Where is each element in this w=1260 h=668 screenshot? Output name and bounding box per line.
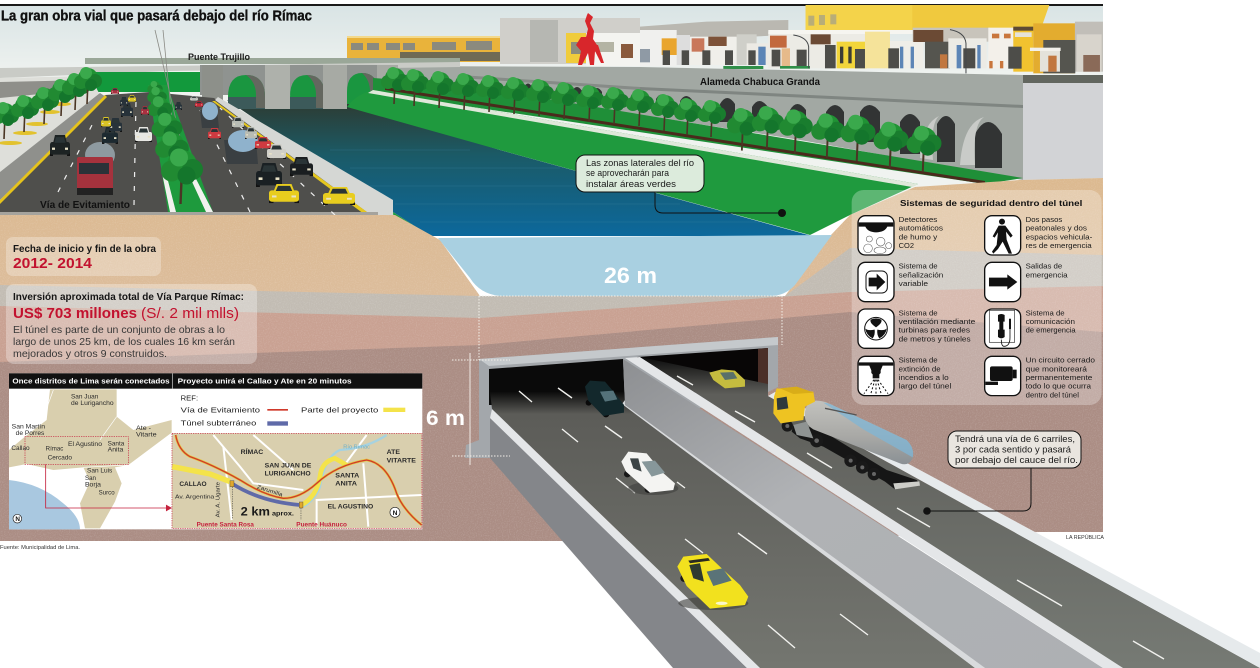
map: project route xyxy=(172,433,422,529)
label: Via de Evitamiento: Vía de Evitamiento xyxy=(40,200,130,211)
panel: investment: (S/. 2 mil mlls) xyxy=(141,305,239,322)
map: project route: ANITA xyxy=(335,481,357,488)
panel: project dates: Fecha de inicio y fin de la obra xyxy=(13,244,156,255)
label: Alameda Chabuca Granda: Alameda Chabuca Granda xyxy=(700,77,820,88)
back buildings west xyxy=(347,18,640,66)
map: Lima districts: San Martín xyxy=(12,423,45,430)
map legend: Parte del proyecto xyxy=(301,405,378,414)
text: pedestrian exits: espacios vehicula- xyxy=(1026,232,1093,241)
map: Lima districts: San Luis xyxy=(87,467,113,474)
map: project route: Puente Santa Rosa xyxy=(197,523,255,529)
panel: maps xyxy=(9,373,422,529)
map: project route: CALLAO xyxy=(179,481,207,488)
text: pedestrian exits: Dos pasos xyxy=(1026,215,1062,224)
skyline buildings east xyxy=(640,5,1103,73)
credit: LA REPÚBLICA xyxy=(1066,534,1104,541)
text: detectors: Detectores xyxy=(899,215,937,224)
map: Lima districts: Ate - xyxy=(136,425,151,432)
text: telephone: comunicación xyxy=(1026,317,1075,326)
map header bar: Proyecto unirá el Callao y Ate en 20 minutos xyxy=(178,377,352,386)
map: project route: RÍMAC xyxy=(241,447,263,456)
lane markings xyxy=(519,376,1164,659)
panel: investment xyxy=(6,284,257,364)
text: ventilation: ventilación mediante xyxy=(899,317,975,326)
map legend: REF: xyxy=(181,394,198,403)
label: Puente Trujillo: Puente Trujillo xyxy=(188,52,250,62)
map: project route: N xyxy=(393,510,398,517)
map: Lima districts: Santa xyxy=(108,440,125,447)
map: project route: Av. Argentina xyxy=(175,494,215,500)
text: fire extinction: Sistema de xyxy=(899,356,938,365)
icon: emergency exit arrow xyxy=(985,262,1021,302)
callout: green areas: instalar áreas verdes xyxy=(586,179,677,189)
text: ventilation: de metros y túneles xyxy=(899,334,971,343)
callout: green areas: se aprovecharán para xyxy=(586,168,669,178)
top rule xyxy=(0,4,1103,6)
left tunnel wall slope xyxy=(490,417,747,668)
callout: six lanes xyxy=(923,431,1081,515)
text: signage: Sistema de xyxy=(899,262,938,271)
map header bar xyxy=(9,373,422,389)
text: closed circuit xyxy=(1026,356,1095,399)
icon: fire sprinkler xyxy=(858,356,894,396)
green bank with tree strip xyxy=(347,67,1023,235)
text: detectors: de humo y xyxy=(899,232,937,241)
text: ventilation: Sistema de xyxy=(899,308,938,317)
icon: CCTV camera xyxy=(985,356,1021,396)
map: project route: Río Rímac xyxy=(343,444,370,450)
map: Lima districts: Callao xyxy=(11,445,30,452)
map: Lima districts: de Lurigancho xyxy=(71,400,114,407)
source note: Fuente: Municipalidad de Lima. xyxy=(0,545,80,551)
callout: six lanes: 3 por cada sentido y pasará xyxy=(955,444,1072,456)
map: project route: LURIGANCHO xyxy=(265,471,311,478)
map legend: Túnel subterráneo xyxy=(181,419,256,428)
callout: six lanes: Tendrá una vía de 6 carriles, xyxy=(955,434,1075,445)
text: telephone: de emergencia xyxy=(1026,326,1076,335)
vehicle: yellow sports car xyxy=(677,554,748,610)
map: Lima districts: El Agustino xyxy=(68,441,102,448)
text: pedestrian exits xyxy=(1026,215,1093,250)
Puente Trujillo bridge xyxy=(0,58,460,109)
map: project route: EL AGUSTINO xyxy=(328,503,373,510)
right tunnel mouth xyxy=(637,348,768,396)
text: detectors: CO2 xyxy=(899,241,914,250)
callout: six lanes: por debajo del cauce del río. xyxy=(955,455,1078,466)
text: exits xyxy=(1026,262,1068,279)
dimension: 26 m: 26 m xyxy=(604,263,657,288)
map: project route: SANTA xyxy=(335,472,359,479)
map: Lima districts: de Porres xyxy=(16,430,45,437)
Via de Evitamiento road xyxy=(0,30,430,236)
vehicle: small yellow car xyxy=(709,369,745,388)
right carriageway xyxy=(640,357,1260,668)
map legend: Vía de Evitamiento xyxy=(181,406,260,415)
title: La gran obra vial que pasará debajo del río Rímac xyxy=(1,8,312,24)
panel: security systems xyxy=(852,190,1102,405)
panel: project dates xyxy=(6,237,161,276)
map: Lima districts: San xyxy=(85,475,96,482)
map: project route: Puente Huánuco xyxy=(296,523,347,529)
text: closed circuit: permanentemente xyxy=(1026,373,1092,382)
icon: pedestrian xyxy=(985,216,1021,255)
icon: ventilation fan xyxy=(858,309,894,348)
map: Lima districts: Borja xyxy=(85,481,101,488)
tanker trucks on road xyxy=(200,102,219,128)
text: fire extinction: largo del túnel xyxy=(899,382,952,391)
map header bar: Once distritos de Lima serán conectados xyxy=(12,377,170,386)
text: exits: Salidas de xyxy=(1026,262,1062,271)
callout: green areas: Las zonas laterales del río xyxy=(586,158,694,168)
text: closed circuit: dentro del túnel xyxy=(1026,390,1079,399)
vehicle: tanker truck xyxy=(773,387,920,489)
text: closed circuit: Un circuito cerrado xyxy=(1026,356,1095,365)
text: closed circuit: todo lo que ocurra xyxy=(1026,382,1092,391)
map legend xyxy=(181,394,405,428)
red cement truck xyxy=(77,142,115,195)
viaduct: Alameda Chabuca Granda wall xyxy=(398,66,1103,180)
text: closed circuit: que monitoreará xyxy=(1026,364,1088,373)
panel: investment: mejorados y otros 9 construidos. xyxy=(13,348,167,360)
text: fire extinction: incendios a lo xyxy=(899,373,949,382)
map: project route: aprox. xyxy=(272,511,294,517)
sky xyxy=(0,6,1103,216)
panel: investment: US$ 703 millones xyxy=(13,305,137,322)
statue: red figure xyxy=(576,13,604,65)
vehicle: white SUV xyxy=(621,452,678,495)
map: Lima districts: San Juan xyxy=(71,393,99,400)
left tunnel mouth xyxy=(489,359,625,405)
dimension: 6 m xyxy=(426,353,510,465)
panel: investment: Inversión aproximada total de Vía Parque Rímac: xyxy=(13,292,244,303)
icon: emergency telephone xyxy=(985,309,1021,348)
map: project route: Av. A. Ugarte xyxy=(215,482,221,517)
map: project route: 2 km xyxy=(241,504,270,518)
left carriageway xyxy=(490,392,975,668)
left plaza and trees xyxy=(0,67,106,200)
text: signage: señalización xyxy=(899,270,943,279)
Rimac river water xyxy=(227,100,812,236)
text: detectors xyxy=(899,215,943,250)
tunnel structure xyxy=(465,337,1260,668)
ground cross-section layers xyxy=(0,170,1103,545)
map: Lima districts: Surco xyxy=(99,490,115,497)
map: project route: Zarumilla xyxy=(256,485,284,499)
panel: investment: El túnel es parte de un conjunto de obras a lo xyxy=(13,324,225,336)
map: project route: SAN JUAN DE xyxy=(265,462,312,469)
map: Lima districts: N xyxy=(15,516,20,523)
text: telephone xyxy=(1026,308,1076,335)
text: signage xyxy=(899,262,943,288)
map: project route: ATE xyxy=(387,449,401,456)
panel: security systems: Sistemas de seguridad dentro del túnel xyxy=(900,198,1082,208)
map: project route: VITARTE xyxy=(387,458,417,465)
text: pedestrian exits: res de emergencia xyxy=(1026,241,1092,250)
text: ventilation: turbinas para redes xyxy=(899,326,970,335)
map: Lima districts xyxy=(9,389,172,529)
map: Lima districts: Anita xyxy=(108,447,124,454)
vehicle: black SUV xyxy=(585,381,624,417)
dimension: 26 m xyxy=(479,263,782,360)
map: Lima districts: Rímac xyxy=(46,445,64,452)
text: pedestrian exits: peatonales y dos xyxy=(1026,224,1087,233)
central median wall xyxy=(623,359,1103,668)
text: detectors: automáticos xyxy=(899,224,943,233)
callout: green areas xyxy=(576,155,786,217)
text: fire extinction: extinción de xyxy=(899,364,941,373)
icon: smoke detector xyxy=(858,216,894,255)
dimension: 6 m: 6 m xyxy=(426,407,465,430)
map: Lima districts: Cercado xyxy=(48,455,72,462)
map: Lima districts: Vitarte xyxy=(136,432,157,439)
panel: investment: largo de unos 25 km, de los cuales 16 km serán xyxy=(13,336,235,348)
text: signage: variable xyxy=(899,279,928,288)
icon: variable signage xyxy=(858,262,894,302)
text: ventilation xyxy=(899,308,975,343)
text: exits: emergencia xyxy=(1026,270,1068,279)
river cross-section xyxy=(438,235,832,296)
panel: project dates: 2012- 2014 xyxy=(13,255,93,272)
bridge arches xyxy=(228,73,378,109)
text: telephone: Sistema de xyxy=(1026,308,1065,317)
text: fire extinction xyxy=(899,356,952,391)
